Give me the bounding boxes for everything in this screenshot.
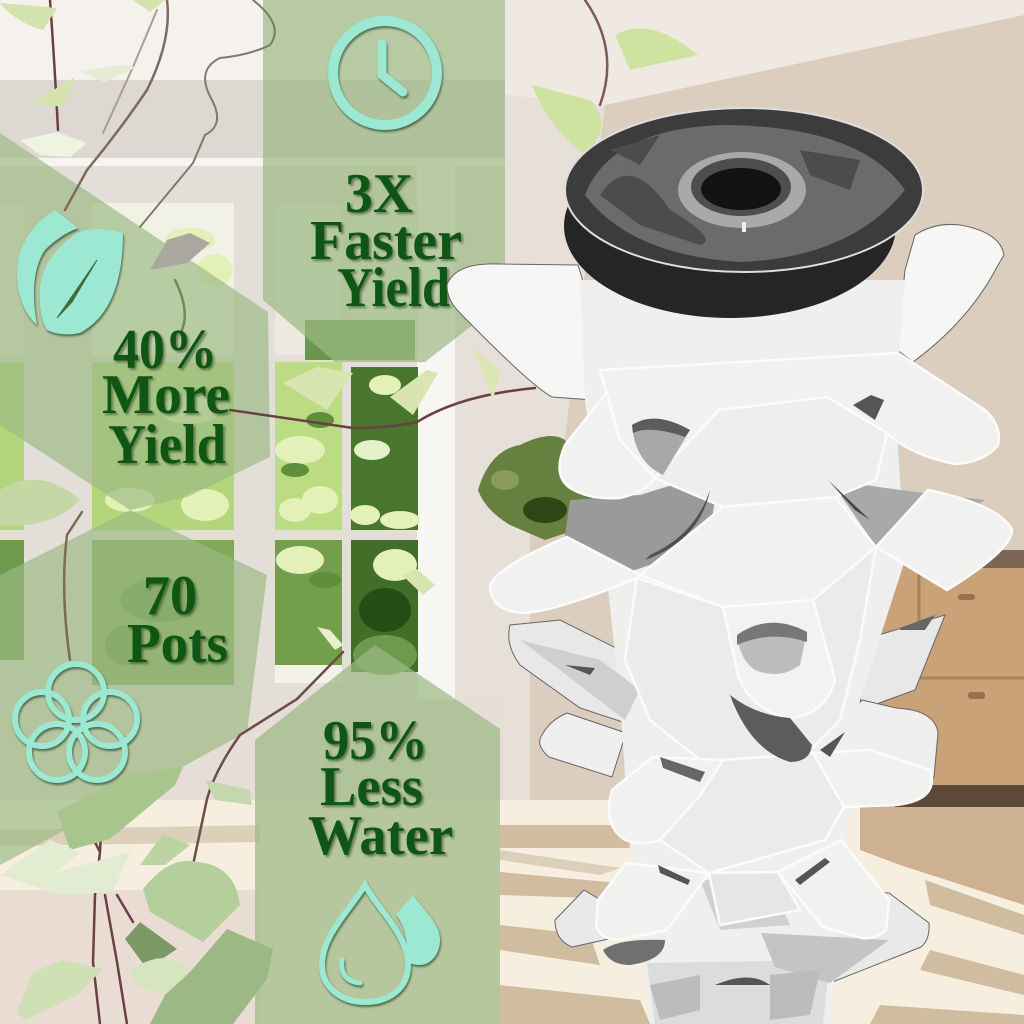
text: 70 pots: 70 — [143, 565, 197, 627]
banner: 40% more yield — [0, 133, 270, 510]
text: 95% less water: Water — [308, 805, 453, 867]
text: 3X faster yield: Faster — [310, 210, 462, 272]
text: 3X faster yield — [310, 163, 462, 319]
text: 95% less water: 95% — [323, 710, 428, 772]
cabinet — [860, 550, 1024, 807]
icon: flower — [15, 664, 137, 780]
text: 40% more yield: Yield — [108, 414, 226, 476]
banner: 95% less water — [255, 645, 500, 1024]
lower stem — [647, 960, 830, 1024]
stacking planter tower — [447, 224, 1012, 1024]
text: 40% more yield: More — [102, 364, 230, 426]
banner: 70 pots — [0, 510, 267, 865]
central stem — [580, 280, 905, 1024]
icon: clock — [333, 21, 437, 125]
text: 70 pots: Pots — [127, 613, 228, 675]
text: 3X faster yield: 3X — [345, 163, 413, 225]
icon: leaf — [17, 210, 123, 334]
vines and leaves — [0, 0, 698, 1024]
floor — [0, 800, 1024, 1024]
text: 3X faster yield: Yield — [337, 257, 450, 319]
pocket openings — [565, 395, 935, 985]
text: 40% more yield — [102, 319, 230, 476]
outdoor bush — [478, 436, 598, 540]
tier lobes — [490, 353, 1012, 940]
back pockets — [447, 224, 1004, 983]
text: 40% more yield: 40% — [113, 319, 217, 381]
text: 95% less water — [308, 710, 453, 867]
grey shaded gaps — [520, 470, 985, 1020]
banner: 3X faster yield — [263, 0, 505, 362]
text: 95% less water: Less — [320, 756, 423, 818]
planter lid — [564, 108, 923, 318]
text: 70 pots — [127, 565, 228, 675]
icon: water drops — [322, 885, 440, 1002]
window panes with garden view — [0, 203, 420, 685]
